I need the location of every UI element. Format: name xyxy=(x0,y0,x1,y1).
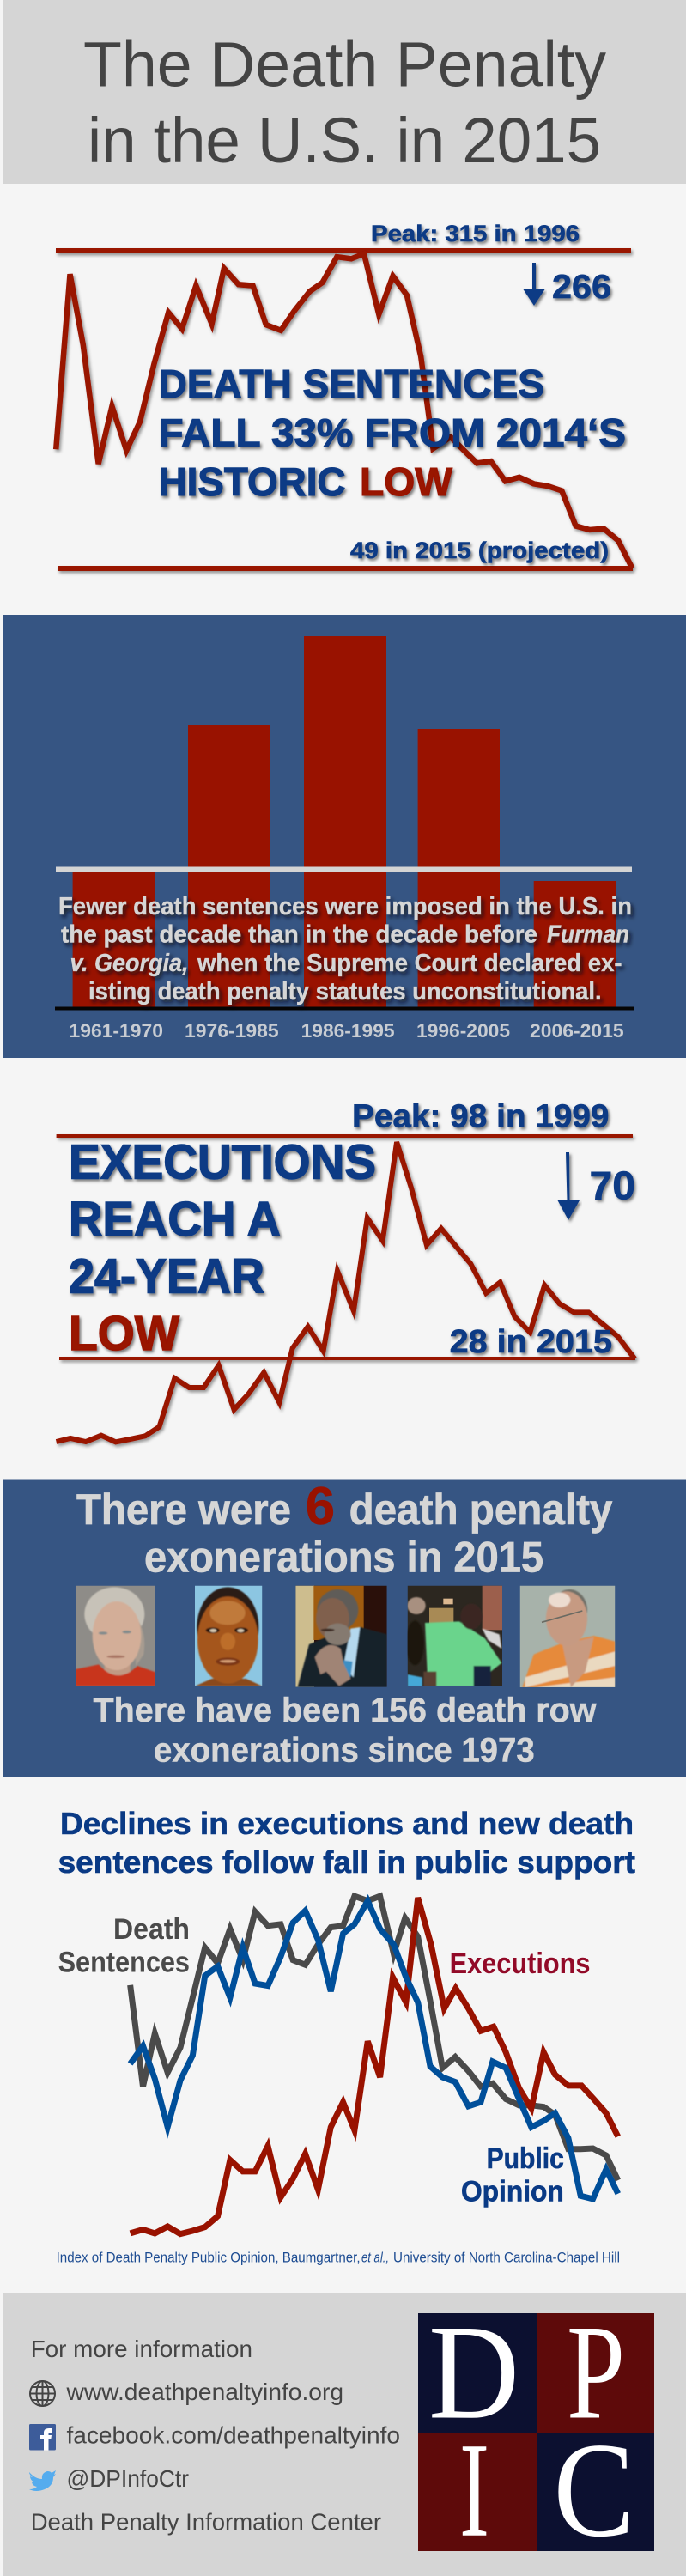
source note: et al., xyxy=(361,2250,389,2266)
exonerations total text: There have been 156 death row xyxy=(93,1692,597,1729)
explanatory text: when the Supreme Court declared ex- xyxy=(197,950,622,977)
arrow: drop of 266 xyxy=(524,263,544,306)
exonerations heading xyxy=(76,1477,613,1582)
headline: executions reach a 24-year low xyxy=(69,1135,376,1361)
DPIC logo: P xyxy=(567,2298,625,2447)
exonerations heading: death penalty xyxy=(349,1485,613,1534)
headline: executions reach a 24-year low: REACH A xyxy=(69,1192,281,1247)
headline: death sentences fall: HISTORIC xyxy=(158,459,345,504)
exonerations heading: exonerations in 2015 xyxy=(144,1534,543,1582)
footer text: facebook: facebook.com/deathpenaltyinfo xyxy=(67,2422,400,2449)
explanatory text: isting death penalty statutes unconstitutional. xyxy=(88,978,602,1005)
headline: death sentences fall: LOW xyxy=(360,459,453,504)
exonerations total text: exonerations since 1973 xyxy=(154,1732,535,1770)
chart heading xyxy=(58,1806,635,1880)
photo: exoneree 4 xyxy=(406,1586,502,1686)
reference line at 2006-2015 pre-Furman level xyxy=(56,867,632,872)
chart lines: peak, low and executions trend xyxy=(57,1134,635,1442)
title text xyxy=(83,29,606,176)
number 70: 70 xyxy=(589,1163,635,1208)
panel: decade bar chart xyxy=(3,615,686,1058)
footer text: website: www.deathpenaltyinfo.org xyxy=(65,2379,343,2405)
source note: University of North Carolina-Chapel Hill xyxy=(393,2250,620,2266)
chart heading: Declines in executions and new death xyxy=(60,1806,634,1841)
year labels xyxy=(69,1020,624,1042)
headline: death sentences fall: FALL 33% FROM 2014‘S xyxy=(158,410,626,455)
panel: public opinion comparison chart xyxy=(57,1806,635,2266)
peak label: Peak: 98 in 1999 xyxy=(352,1098,610,1134)
headline: executions reach a 24-year low: 24-YEAR xyxy=(69,1249,264,1304)
panel: death sentences line chart xyxy=(56,221,633,571)
explanatory text: Furman xyxy=(547,920,629,948)
title banner xyxy=(3,0,686,184)
footer text: for more information: For more information xyxy=(31,2336,252,2362)
photo: exoneree 3 xyxy=(295,1586,387,1687)
number 266: 266 xyxy=(552,269,611,306)
icon: twitter bird xyxy=(29,2470,56,2491)
label: public opinion xyxy=(461,2142,564,2208)
headline: executions reach a 24-year low: EXECUTIONS xyxy=(69,1135,376,1190)
footer text: twitter: @DPInfoCtr xyxy=(67,2465,189,2492)
DPIC logo xyxy=(418,2298,654,2566)
low label: 28 in 2015 xyxy=(450,1324,612,1360)
headline: death sentences fall xyxy=(158,361,626,504)
DPIC logo: I xyxy=(459,2415,489,2566)
bar chart xyxy=(73,636,616,1007)
label: executions: Executions xyxy=(450,1947,591,1980)
panel: exonerations xyxy=(3,1477,686,1777)
label: death sentences: Death xyxy=(113,1913,190,1946)
chart heading: sentences follow fall in public support xyxy=(58,1844,635,1880)
arrow: drop of 70 xyxy=(558,1152,580,1220)
explanatory text: v. Georgia, xyxy=(70,950,189,977)
explanatory text: Fewer death sentences were imposed in the U.S. in xyxy=(58,893,632,920)
year labels: 1986-1995 xyxy=(301,1020,395,1042)
line: public opinion xyxy=(131,1901,618,2199)
title text: The Death Penalty xyxy=(83,29,606,100)
panel: executions line chart xyxy=(57,1098,635,1442)
explanatory text xyxy=(58,893,632,1005)
source note: Index of Death Penalty Public Opinion, Baumgartner, xyxy=(57,2250,361,2266)
label: public opinion: Opinion xyxy=(461,2176,564,2208)
year labels: 2006-2015 xyxy=(530,1020,624,1042)
headline: executions reach a 24-year low: LOW xyxy=(69,1306,179,1361)
chart lines: peak, low and death sentences trend xyxy=(56,248,633,571)
icon: facebook xyxy=(29,2424,56,2451)
multi-line chart xyxy=(131,1896,618,2234)
line: executions xyxy=(131,1898,618,2234)
footer text: organisation name: Death Penalty Information Center xyxy=(31,2509,381,2536)
explanatory text: the past decade than in the decade before xyxy=(61,920,537,948)
headline: death sentences fall: DEATH SENTENCES xyxy=(158,361,544,406)
exonerations heading: There were xyxy=(76,1485,291,1534)
year labels: 1976-1985 xyxy=(185,1020,279,1042)
label: death sentences xyxy=(58,1913,190,1978)
exonerations heading: 6 xyxy=(306,1477,335,1536)
DPIC logo: C xyxy=(554,2415,634,2566)
source note xyxy=(57,2250,620,2266)
title text: in the U.S. in 2015 xyxy=(88,105,601,176)
icon: globe xyxy=(30,2381,55,2406)
low label: 49 in 2015 (projected) xyxy=(350,538,609,563)
year labels: 1961-1970 xyxy=(69,1020,163,1042)
peak label: Peak: 315 in 1996 xyxy=(371,221,580,246)
exonerations total text xyxy=(93,1692,597,1770)
label: death sentences: Sentences xyxy=(58,1946,190,1978)
line: death sentences xyxy=(131,1896,618,2180)
photo: exoneree 2 xyxy=(195,1586,262,1686)
year labels: 1996-2005 xyxy=(416,1020,510,1042)
photo: exoneree 5 xyxy=(520,1586,615,1687)
photo: exoneree 1 xyxy=(76,1586,155,1686)
label: public opinion: Public xyxy=(487,2142,564,2175)
DPIC logo: D xyxy=(428,2298,519,2447)
axis line xyxy=(55,1006,634,1010)
panel: footer xyxy=(3,2293,686,2576)
